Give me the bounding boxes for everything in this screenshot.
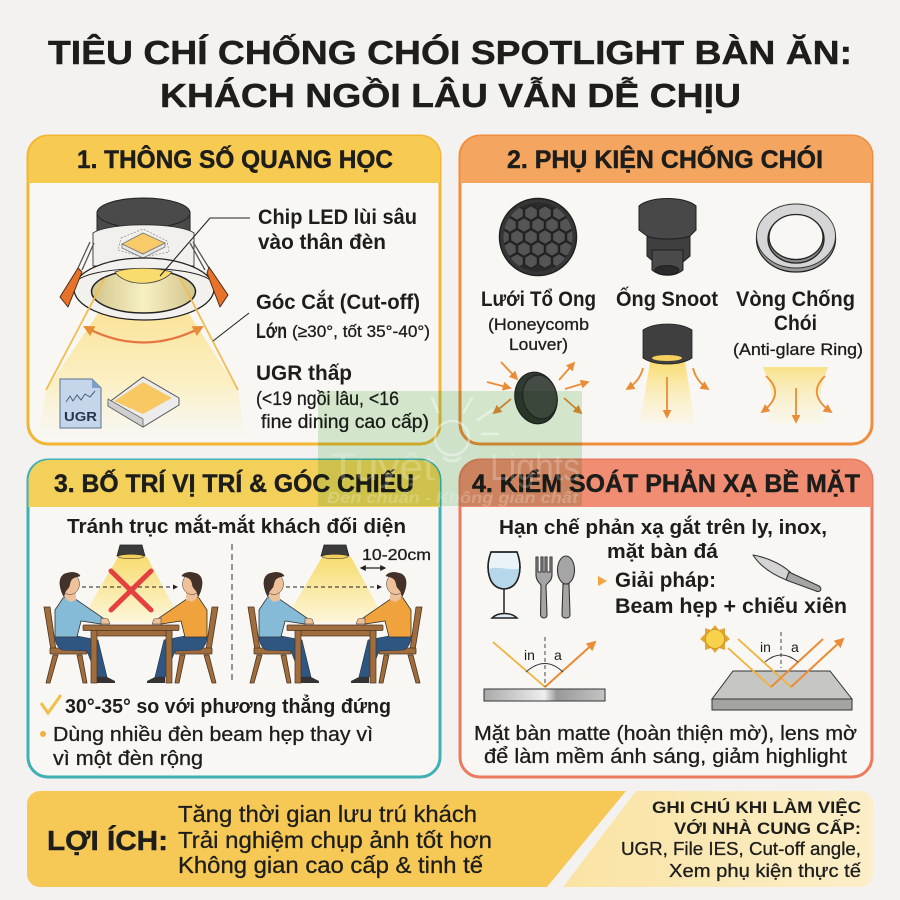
light cone [38, 300, 246, 440]
label: offset: 10-20cm [362, 547, 431, 564]
labels: accessories: Louver) [509, 335, 568, 354]
icon: louver with arrows [487, 362, 588, 428]
text: angle: 30°-35° so với phương thẳng đứng [65, 694, 391, 718]
icon: LED chip [108, 377, 179, 427]
text: matte surface [474, 723, 857, 768]
watermark: Đèn chuẩn - Không gian chất [327, 489, 579, 507]
labels: accessories: Chói [774, 312, 817, 335]
labels: accessories [481, 287, 863, 359]
benefits list: Không gian cao cấp & tinh tế [178, 852, 483, 878]
icon: downlight [60, 198, 228, 320]
label: UGR: UGR thấp [256, 362, 352, 385]
banner: supplier note: GHI CHÚ KHI LÀM VIỆC [652, 798, 861, 817]
panel 4 subheading [499, 515, 827, 563]
icon: UGR file [60, 379, 101, 428]
labels: accessories: (Anti-glare Ring) [733, 340, 863, 359]
icon: triangle bullet [598, 576, 607, 586]
label: cut-off: Góc Cắt (Cut-off) [256, 290, 420, 314]
label: UGR: (<19 ngồi lâu, <16 [256, 389, 399, 410]
title [48, 33, 852, 114]
icon: wine glass [488, 552, 520, 618]
bullet [40, 731, 46, 737]
panel 4 header: 4. KIỂM SOÁT PHẢN XẠ BỀ MẶT [472, 468, 860, 498]
cut-off lines [46, 278, 238, 390]
panel 4 subheading: Hạn chế phản xạ gắt trên ly, inox, [499, 515, 827, 539]
banner: supplier note: Xem phụ kiện thực tế [669, 861, 861, 881]
diagram: glossy reflection: in [524, 647, 535, 663]
table [83, 625, 179, 683]
diagram: glossy reflection [484, 637, 605, 701]
label: UGR: fine dining cao cấp) [261, 412, 429, 433]
text: matte surface: để làm mềm ánh sáng, giảm highlight [484, 746, 847, 768]
icon: red cross [111, 571, 151, 610]
diagram: glossy reflection: a [554, 647, 562, 663]
text: many narrow beams: Dùng nhiều đèn beam hẹp thay vì [53, 724, 373, 746]
label: cut-off: Lớn [256, 320, 287, 343]
icon: UGR file: UGR [64, 409, 98, 424]
left guest [44, 572, 115, 683]
text: matte surface: Mặt bàn matte (hoàn thiện mờ), lens mờ [474, 723, 857, 745]
text: solution [615, 569, 847, 618]
panel 2 header: 2. PHỤ KIỆN CHỐNG CHÓI [507, 144, 823, 174]
label: chip LED: Chip LED lùi sâu [258, 206, 417, 229]
label: cut-off: (≥30°, tốt 35°-40°) [292, 322, 430, 341]
scene: correct placement [248, 545, 422, 683]
panel 3 header: 3. BỐ TRÍ VỊ TRÍ & GÓC CHIẾU [54, 468, 414, 498]
icon: honeycomb louver [497, 198, 579, 276]
watermark: Lights [490, 447, 580, 489]
watermark [318, 391, 582, 507]
watermark bulb [432, 398, 498, 461]
icon: anti-glare ring [756, 204, 836, 272]
labels: accessories: Ống Snoot [616, 287, 718, 311]
banner: supplier note: UGR, File IES, Cut-off angle, [621, 839, 861, 859]
arrow: cut-off angle [85, 327, 202, 342]
icon: check [41, 695, 61, 713]
divider dashed [231, 544, 233, 682]
right guest [147, 572, 218, 683]
diagram: matte reflection: in [760, 639, 771, 655]
benefits list: Tăng thời gian lưu trú khách [178, 801, 477, 827]
leader lines [160, 218, 250, 341]
benefits list [178, 801, 492, 878]
diagram: matte reflection: a [791, 639, 799, 655]
panel 2 header [460, 136, 872, 183]
panel: bố trí vị trí và góc chiếu [28, 460, 440, 777]
scene: incorrect placement [44, 545, 218, 683]
panel: phụ kiện chống chói [460, 136, 872, 444]
labels: accessories: Lưới Tổ Ong [481, 288, 596, 311]
text: many narrow beams: vì một đèn rộng [53, 748, 203, 770]
label: cut-off [256, 290, 430, 343]
watermark: Tuyệt [330, 447, 435, 489]
text: solution: Beam hẹp + chiếu xiên [615, 595, 847, 618]
panel 4 header [460, 460, 872, 507]
text: solution: Giải pháp: [615, 569, 716, 592]
icon: fork and spoon [536, 556, 574, 618]
banner: supplier note [563, 791, 873, 887]
panel 1 header [28, 136, 440, 183]
banner: benefits [27, 791, 626, 887]
icon: snoot with beam [627, 324, 708, 423]
label: chip LED: vào thân đèn [258, 231, 386, 254]
text: many narrow beams [53, 724, 373, 770]
panel 4 subheading: mặt bàn đá [607, 541, 719, 563]
benefits heading: LỢI ÍCH: [47, 825, 168, 856]
panel 1 header: 1. THÔNG SỐ QUANG HỌC [77, 144, 393, 174]
panel: kiểm soát phản xạ bề mặt [460, 460, 872, 777]
panel: thông số quang học [28, 136, 440, 444]
icon: ring light control [762, 367, 831, 423]
labels: accessories: Vòng Chống [736, 288, 855, 311]
labels: accessories: (Honeycomb [488, 315, 589, 334]
label: chip LED [258, 206, 417, 254]
icon: knife [753, 555, 821, 592]
panel 3 subheading: Tránh trục mắt-mắt khách đối diện [67, 514, 406, 538]
banner: supplier note: VỚI NHÀ CUNG CẤP: [674, 819, 861, 838]
title: KHÁCH NGỒI LÂU VẪN DỄ CHỊU [160, 77, 741, 114]
label: UGR [256, 362, 429, 433]
diagram: matte reflection [700, 625, 852, 710]
icon: snoot [639, 198, 696, 275]
benefits list: Trải nghiệm chụp ảnh tốt hơn [178, 827, 492, 853]
panel 3 header [28, 460, 440, 507]
title: TIÊU CHÍ CHỐNG CHÓI SPOTLIGHT BÀN ĂN: [48, 33, 852, 71]
